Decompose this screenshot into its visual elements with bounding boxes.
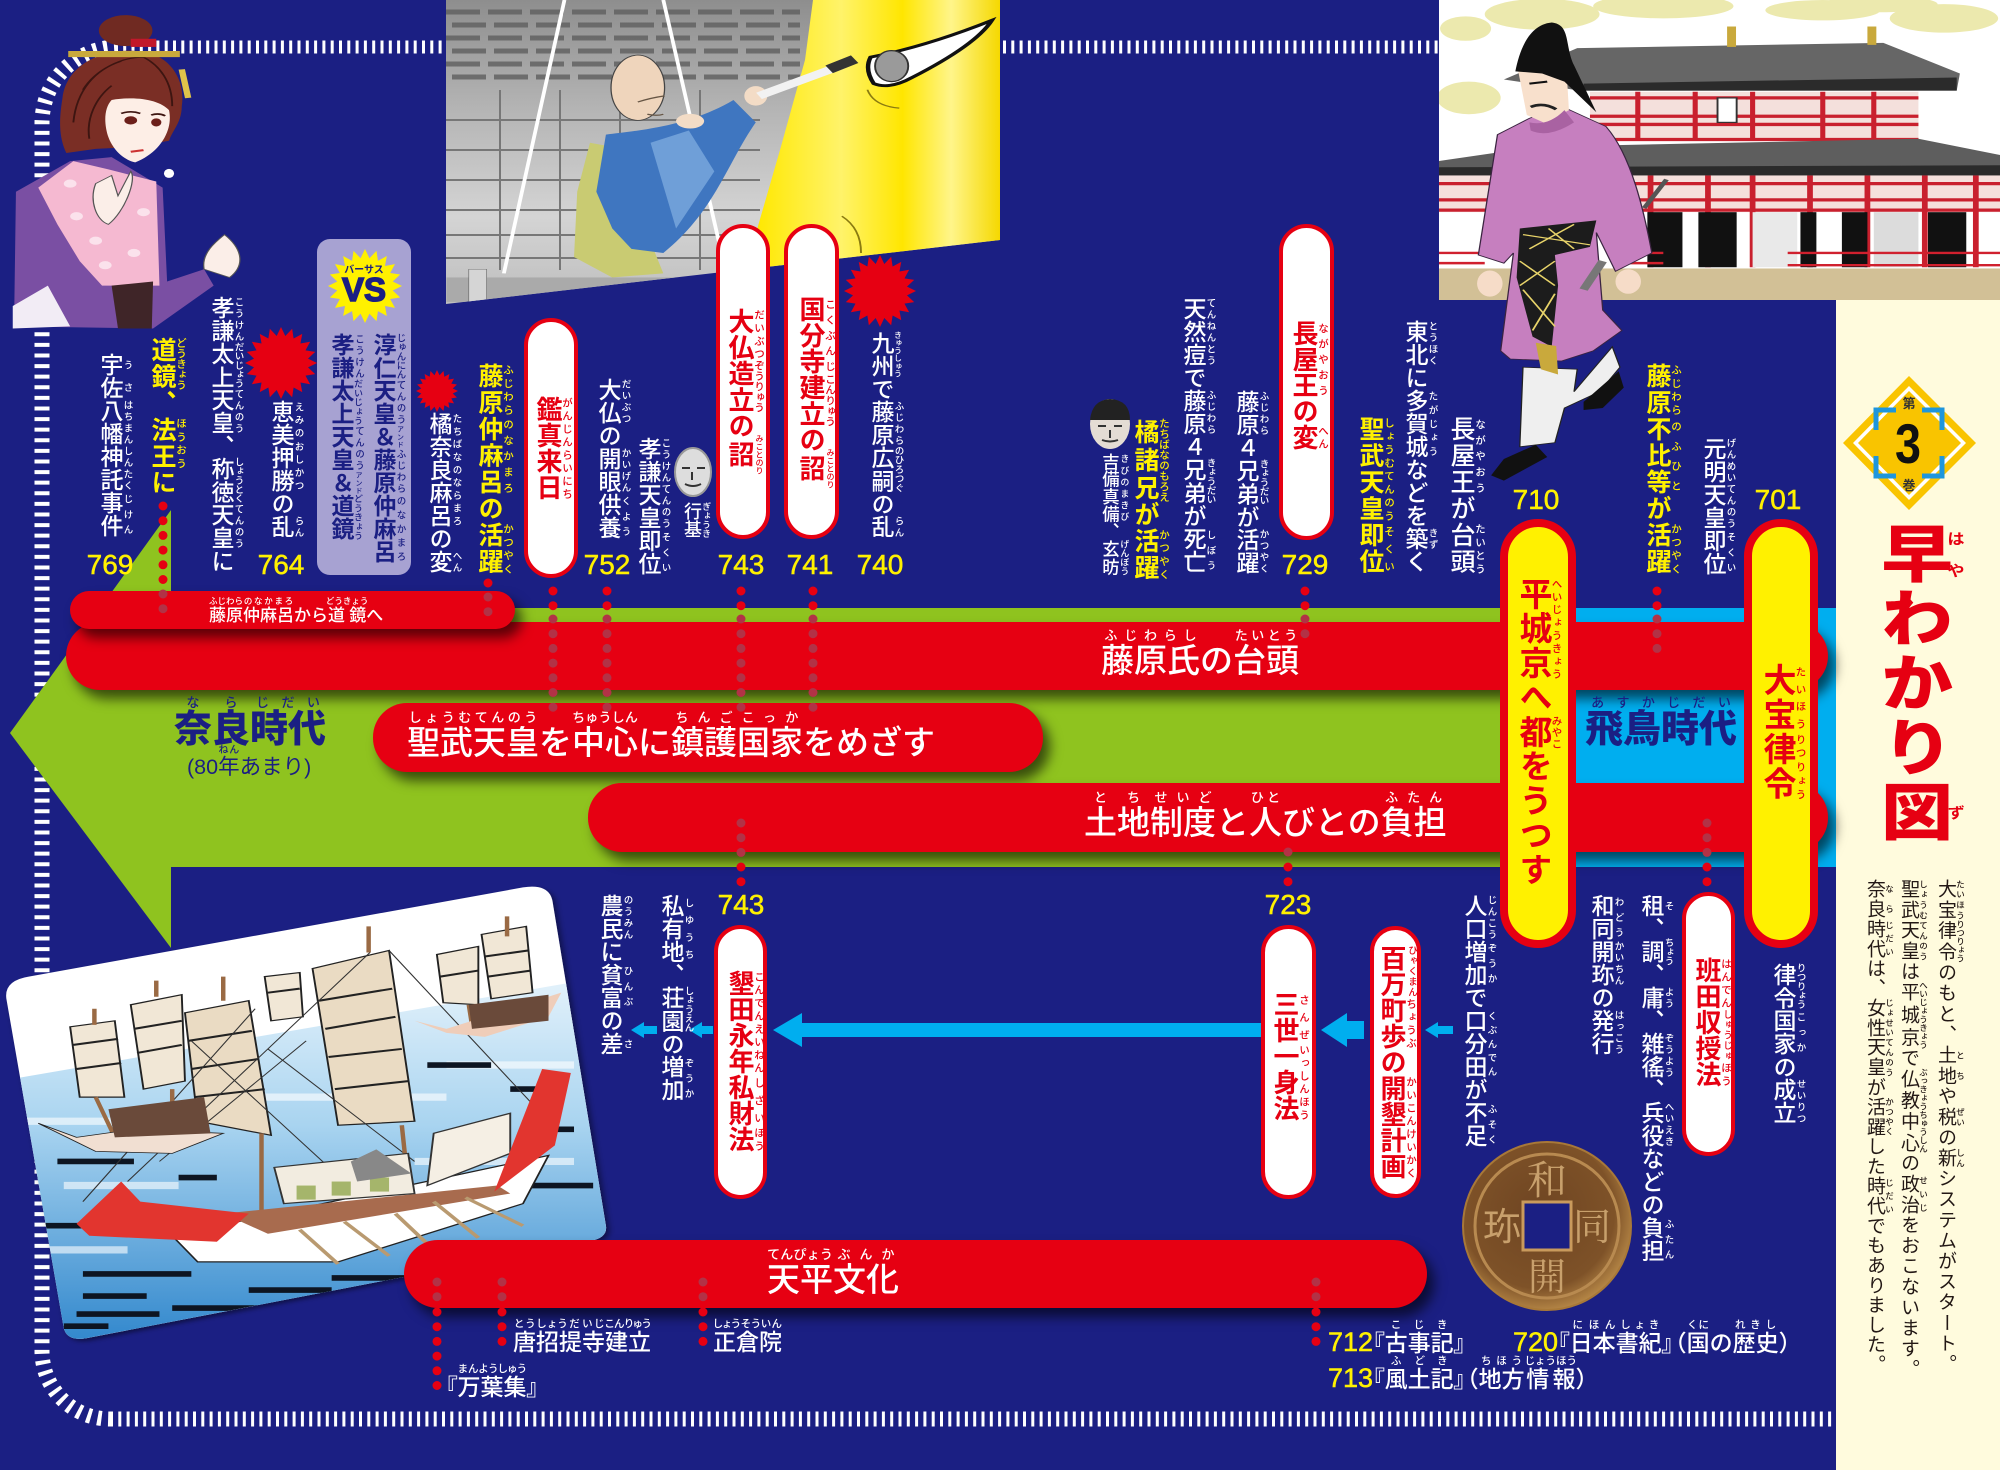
years row: 729 bbox=[1282, 549, 1328, 580]
years row: 740 bbox=[857, 549, 903, 580]
upper events text: 吉備真備きびのまきび 、 玄昉げんぼう bbox=[1100, 453, 1129, 576]
upper events text: 鑑真がんじん 来日らいにち bbox=[533, 396, 573, 500]
band: Tenpyo culture bbox=[404, 1240, 1427, 1308]
years row: 752 bbox=[584, 549, 630, 580]
pillar heading: Taiho code: 大宝たいほう 律令りつりょう bbox=[1759, 663, 1806, 801]
years row: 723 bbox=[1265, 889, 1311, 920]
lower events text: 農民のうみん に 貧富ひんぷ の 差さ bbox=[597, 894, 632, 1055]
upper events text: 長屋王ながやおう の 変へん bbox=[1289, 320, 1329, 450]
side panel description: 大宝たいほう 律令りつりょう のもと、 土地とち や 税ぜい の 新しん システムがスタート。 bbox=[1935, 879, 1966, 1374]
pill: Great Buddha edict bbox=[716, 224, 770, 539]
pill: Konden law bbox=[714, 925, 767, 1199]
illustration: Heijo palace gate bbox=[1437, 0, 2000, 301]
upper events text: 天然痘てんねんとう で 藤原ふじわら ４ 兄弟きょうだい が 死亡しぼう bbox=[1180, 297, 1216, 573]
Tenpyo culture items: 712『古事記こじき 』 bbox=[1328, 1319, 1465, 1357]
illustration: Wado-kaichin coin: 同 bbox=[1573, 1196, 1611, 1251]
band labels: 奈良なら 時代じだい bbox=[174, 695, 326, 751]
lavender VS box bbox=[317, 239, 411, 575]
illustration: woman in court dress bbox=[13, 15, 240, 328]
upper events text: 大仏だいぶつ 造立ぞうりゅう の詔みことのり bbox=[725, 308, 765, 474]
volume 3 diamond badge: 第 bbox=[1902, 393, 1916, 412]
illustration: noble in purple robe bbox=[1477, 22, 1667, 481]
upper events text: 藤原ふじわら ４ 兄弟きょうだい が 活躍かつやく bbox=[1233, 390, 1268, 574]
pill: Ganjin arrives bbox=[524, 318, 578, 578]
lower events text: 租そ 、調ちょう、 庸よう 、 雑徭ぞうよう 、 兵役へいえき などの 負担ふたん bbox=[1638, 894, 1674, 1262]
upper events text: 国分寺こくぶんじ 建立こんりゅう の詔みことのり bbox=[796, 296, 836, 488]
years row: 743 bbox=[718, 889, 764, 920]
upper events text: 道鏡どうきょう 、 法王ほうおう に bbox=[148, 337, 187, 496]
band labels: (80年ねん あまり) bbox=[187, 744, 311, 778]
lower events text: 律令りつりょう 国家こっか の 成立せいりつ bbox=[1770, 963, 1806, 1124]
lower events text: 私有地しゆうち 、 荘園しょうえん の 増加ぞうか bbox=[658, 894, 694, 1101]
lower events text: 墾田こんでん 永年えいねん 私財しざい 法ほう bbox=[725, 970, 765, 1152]
lower events text: 百万ひゃくまん 町歩ちょうぶ の 開墾かいこん 計画けいかく bbox=[1377, 945, 1417, 1179]
Tenpyo culture items: 正倉院しょうそういん bbox=[713, 1318, 782, 1355]
lower events text: 人口じんこう 増加ぞうか で 口分田くぶんでん が 不足ふそく bbox=[1461, 894, 1496, 1147]
band labels: 聖武しょうむ 天皇てんのう を中心ちゅうしん に鎮護ちんご 国家こっか をめざす bbox=[407, 710, 935, 761]
cyan arrows bbox=[631, 1013, 1453, 1047]
upper events text: 橘諸兄たちばなのもろえ が 活躍かつやく bbox=[1131, 418, 1170, 581]
upper events text: 宇佐うさ 八幡はちまん 神託しんたく 事件じけん bbox=[97, 353, 132, 537]
illustration: Japanese envoy ships card bbox=[0, 887, 638, 1346]
pill: Kokubunji edict bbox=[784, 224, 839, 539]
years row: 710 bbox=[1513, 484, 1559, 515]
upper events text: 九州きゅうしゅう で 藤原ふじわら 広嗣のひろつぐ の 乱らん bbox=[868, 331, 904, 538]
band labels: 天平てんぴょう 文化ぶんか bbox=[767, 1247, 899, 1298]
upper events text: 淳仁じゅんにん 天皇てんのう ＆アンド 藤原ふじわら 仲麻呂のなかまろ bbox=[370, 333, 406, 563]
pillar heading: move to Heijo-kyo: 平城京へいじょうきょう へ 都みやこ をうつす bbox=[1515, 577, 1562, 887]
upper events text: 孝謙こうけん 太上だいじょう 天皇てんのう ＆アンド 道鏡どうきょう bbox=[328, 333, 364, 540]
years row: 769 bbox=[87, 549, 133, 580]
years row: 701 bbox=[1755, 484, 1801, 515]
illustration: Wado-kaichin coin: 和 bbox=[1527, 1149, 1567, 1206]
band labels: 藤原氏ふじわらし の台頭たいとう bbox=[1101, 628, 1299, 679]
years row: 764 bbox=[258, 549, 304, 580]
upper events text: 行基ぎょうき bbox=[682, 502, 711, 538]
cream side panel bbox=[1836, 300, 2000, 1470]
lower events text: 和同わどう 開珎かいちん の 発行はっこう bbox=[1588, 894, 1624, 1055]
pillar: move to Heijo-kyo bbox=[1500, 519, 1576, 948]
Nara period green arrow bbox=[10, 510, 1500, 948]
volume 3 diamond badge: 3 bbox=[1895, 412, 1921, 475]
band: land system bbox=[588, 783, 1828, 852]
lower events text: 三世さんぜ 一身いっしん 法ほう bbox=[1270, 991, 1310, 1121]
lower events text: 班田はんでん 収授しゅうじゅ 法ほう bbox=[1692, 957, 1732, 1087]
band labels: 飛鳥あすか 時代じだい bbox=[1585, 695, 1737, 751]
side panel description: 聖武しょうむ 天皇てんのう は 平城京へいじょうきょう で 仏教ぶっきょう 中心ちゅうしん の 政治せいじ をおこないます。 bbox=[1898, 879, 1928, 1380]
years row: 741 bbox=[787, 549, 833, 580]
Tenpyo culture items: 『万葉集まんようしゅう 』 bbox=[446, 1363, 538, 1400]
Tenpyo culture items: 713『風土記ふどき 』（地方ちほう 情報じょうほう ） bbox=[1328, 1355, 1598, 1393]
band: Fujiwara clan rise bbox=[66, 622, 1828, 690]
upper events text: 橘奈良麻呂たちばなのならまろ の 変へん bbox=[426, 412, 462, 573]
side panel description: 奈良なら 時代じだい は、 女性じょせい 天皇てんのう が 活躍かつやく した 時代じだい でもありました。 bbox=[1864, 879, 1894, 1374]
illustration: monk painting the Great Buddha bbox=[446, 0, 1000, 310]
pillar: Taiho code bbox=[1744, 519, 1818, 948]
upper events text: 元明げんめい 天皇てんのう 即位そくい bbox=[1700, 437, 1736, 575]
band: Fujiwara no Nakamaro to Dokyo bbox=[70, 591, 515, 629]
illustration: Wado-kaichin coin: 珎 bbox=[1483, 1196, 1521, 1251]
upper events text: 藤原ふじわら 不比等のふひと が 活躍かつやく bbox=[1643, 363, 1682, 575]
band labels: 藤原ふじわら 仲麻呂のなかまろ から道鏡どうきょう へ bbox=[209, 596, 383, 625]
band labels: 土地とち 制度せいど と人ひと びとの負担ふたん bbox=[1084, 790, 1447, 841]
Asuka period cyan band bbox=[1576, 608, 1836, 867]
Tenpyo culture items: 唐招提寺とうしょうだいじ 建立こんりゅう bbox=[513, 1318, 651, 1355]
side panel title: 早はや わかり 図ず bbox=[1870, 522, 1965, 844]
pill: Handen law bbox=[1682, 892, 1735, 1156]
upper events text: 孝謙こうけん 太上だいじょう 天皇てんのう 、 称徳しょうとく 天皇てんのう に bbox=[208, 296, 244, 572]
pill: million-cho plan bbox=[1370, 926, 1421, 1198]
pill: Sanze law bbox=[1261, 925, 1316, 1199]
years row: 743 bbox=[718, 549, 764, 580]
upper events text: 孝謙こうけん 天皇てんのう 即位そくい bbox=[635, 437, 670, 575]
upper events text: 藤原ふじわら 仲麻呂のなかまろ の 活躍かつやく bbox=[475, 363, 514, 575]
upper events text: 長屋王ながやおう が 台頭たいとう bbox=[1447, 416, 1486, 575]
bursts and VS badge: VS bbox=[342, 271, 386, 308]
Tenpyo culture items: 720『日本書紀にほんしょき 』（国くに の歴史れきし ） bbox=[1513, 1319, 1802, 1357]
pill: Nagaya incident bbox=[1279, 224, 1334, 540]
illustration: Wado-kaichin coin: 開 bbox=[1528, 1246, 1566, 1301]
upper events text: 東北とうほく に 多賀城たがじょう などを 築きず く bbox=[1402, 320, 1438, 573]
upper events text: 聖武しょうむ 天皇てんのう 即位そくい bbox=[1356, 416, 1395, 575]
volume 3 diamond badge: 巻 bbox=[1902, 475, 1916, 494]
upper events text: 恵美押勝えみのおしかつ の 乱らん bbox=[268, 400, 304, 538]
band: Emperor Shomu bbox=[373, 703, 1043, 772]
illustration: Wado-kaichin coin bbox=[1463, 1142, 1631, 1310]
bursts and VS badge: バーサス bbox=[344, 261, 384, 276]
upper events text: 大仏だいぶつ の 開眼かいげん 供養くよう bbox=[595, 378, 630, 539]
